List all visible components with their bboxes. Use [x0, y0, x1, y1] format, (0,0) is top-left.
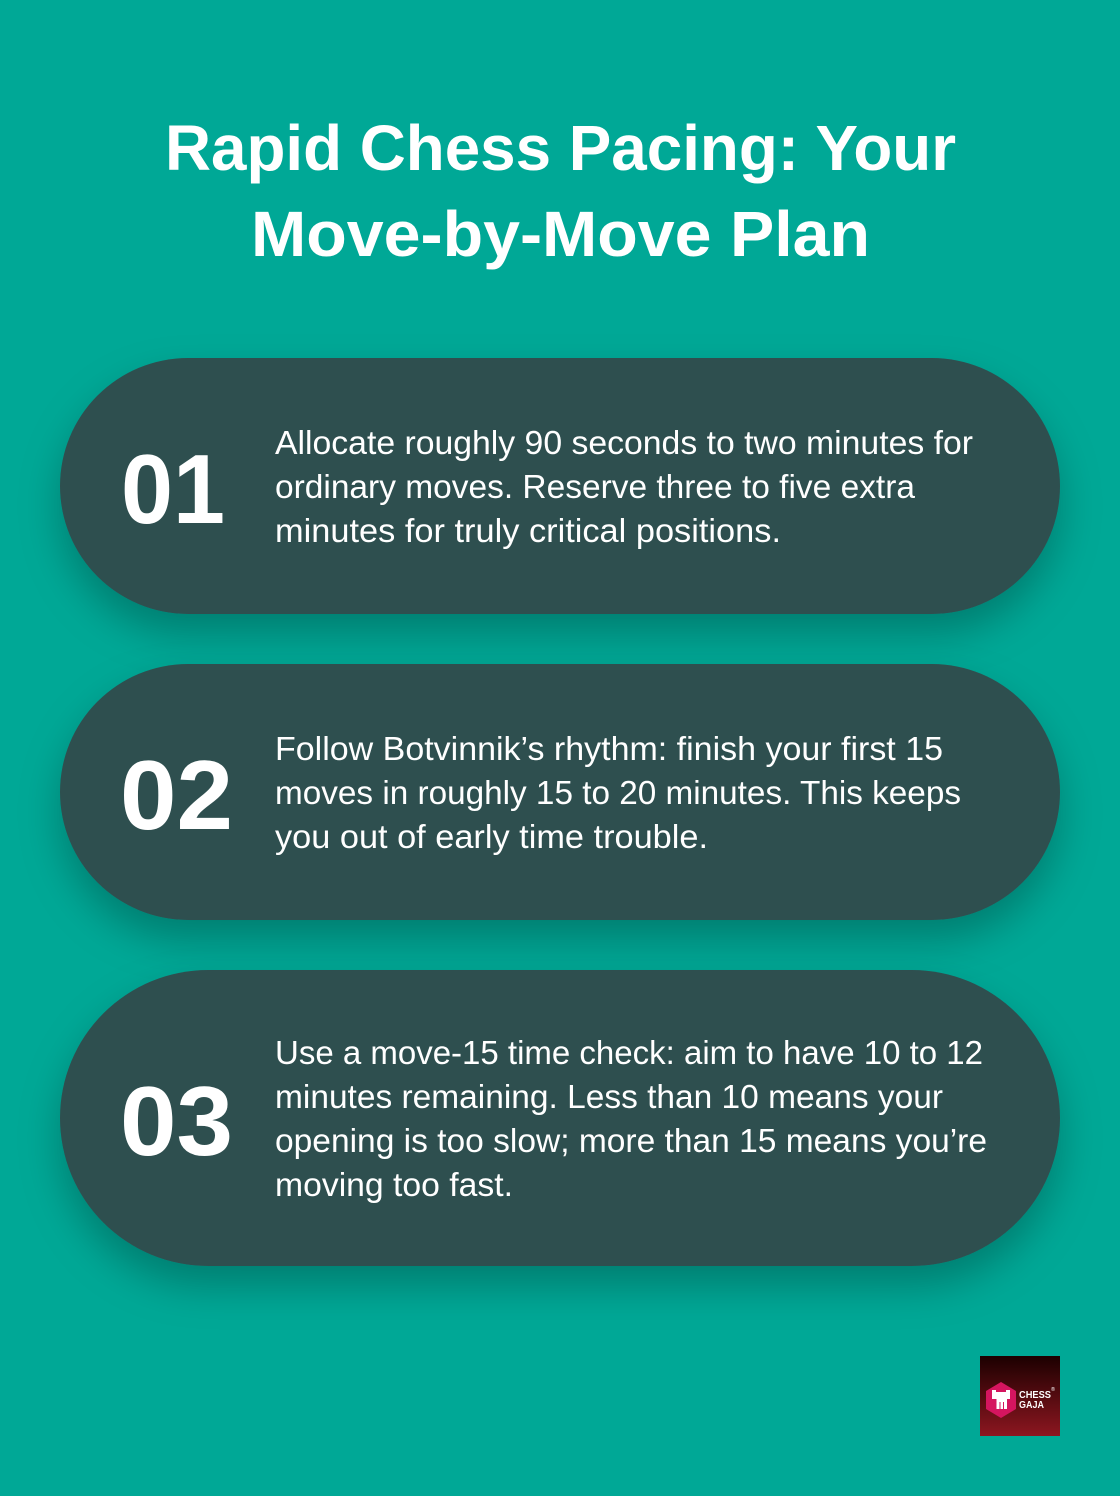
panel: step 02: [60, 664, 1060, 920]
number 03: 03: [120, 1066, 233, 1176]
step 03 text: moving too fast.: [275, 1166, 513, 1203]
step 03 text: Use a move-15 time check: aim to have 10 to 12: [275, 1034, 983, 1071]
logo wordmark: [1019, 1386, 1055, 1411]
logo wordmark: CHESS: [1019, 1390, 1051, 1401]
step 01 text: minutes for truly critical positions.: [275, 512, 781, 549]
step 01 text: Allocate roughly 90 seconds to two minutes for: [275, 424, 973, 461]
step 03 text: minutes remaining. Less than 10 means your: [275, 1078, 943, 1115]
title: Rapid Chess Pacing: Your: [165, 112, 956, 184]
number 01: 01: [121, 434, 225, 544]
title: Move-by-Move Plan: [251, 198, 870, 270]
icon: elephant hexagon: [986, 1382, 1016, 1418]
step 03 text: [275, 1034, 987, 1203]
panel: step 01: [60, 358, 1060, 614]
logo wordmark: ®: [1051, 1386, 1055, 1393]
logo: Chess Gaja: [980, 1356, 1060, 1436]
step 01 text: [275, 424, 973, 549]
step 03 text: opening is too slow; more than 15 means you’re: [275, 1122, 987, 1159]
step 02 text: Follow Botvinnik’s rhythm: finish your first 15: [275, 730, 943, 767]
title: [165, 112, 956, 270]
step 02 text: moves in roughly 15 to 20 minutes. This keeps: [275, 774, 961, 811]
panel: step 03: [60, 970, 1060, 1266]
step 01 text: ordinary moves. Reserve three to five extra: [275, 468, 916, 505]
step 02 text: [275, 730, 961, 855]
step 02 text: you out of early time trouble.: [275, 818, 708, 855]
logo wordmark: GAJA: [1019, 1400, 1044, 1411]
number 02: 02: [120, 740, 233, 850]
